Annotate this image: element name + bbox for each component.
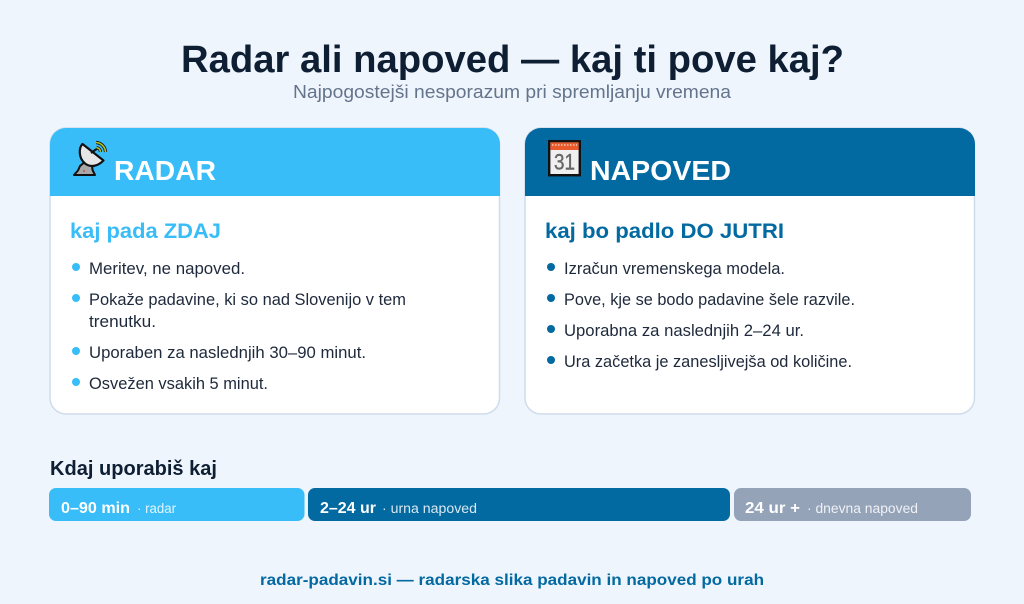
subtitle: Najpogostejši nesporazum pri spremljanju vremena [293,82,732,102]
radar subheading: kaj pada ZDAJ [70,220,221,243]
radar bullet list: trenutku. [89,313,156,331]
icon: calendar [549,141,580,175]
radar header band [50,128,500,196]
radar bullet list: Uporaben za naslednjih 30–90 minut. [89,344,366,362]
napoved heading: NAPOVED [590,155,731,186]
timeline bar: radar: · radar [137,501,176,516]
radar bullet list: Meritev, ne napoved. [89,260,245,278]
title: Radar ali napoved — kaj ti pove kaj? [181,39,844,81]
napoved bullet list: Uporabna za naslednjih 2–24 ur. [564,322,804,340]
timeline bar: daily forecast [734,488,971,521]
radar bullet list [72,260,406,393]
panel: radar [50,128,500,414]
napoved bullet list: Pove, kje se bodo padavine šele razvile. [564,291,855,309]
timeline bar: hourly forecast: · urna napoved [382,501,477,516]
napoved subheading: kaj bo padlo DO JUTRI [545,220,784,243]
timeline heading: Kdaj uporabiš kaj [50,458,217,480]
napoved bullet list: Ura začetka je zanesljivejša od količine. [564,353,852,371]
icon: calendar: 31 [554,150,575,174]
icon: satellite dish [74,142,106,175]
timeline bar: radar: 0–90 min [61,500,130,517]
panel: napoved [525,128,975,414]
radar heading: RADAR [114,155,216,186]
timeline bar: radar [49,488,304,521]
timeline bar: daily forecast: 24 ur + [745,500,800,517]
napoved bullet list: Izračun vremenskega modela. [564,260,785,278]
napoved bullet list [547,260,855,371]
timeline bar: hourly forecast [308,488,730,521]
radar bullet list: Pokaže padavine, ki so nad Slovenijo v tem [89,291,406,309]
timeline bar: daily forecast: · dnevna napoved [807,501,918,516]
timeline bar: hourly forecast: 2–24 ur [320,500,376,517]
footer: radar-padavin.si — radarska slika padavin in napoved po urah [260,572,764,589]
radar bullet list: Osvežen vsakih 5 minut. [89,375,268,393]
napoved header band [525,128,975,196]
